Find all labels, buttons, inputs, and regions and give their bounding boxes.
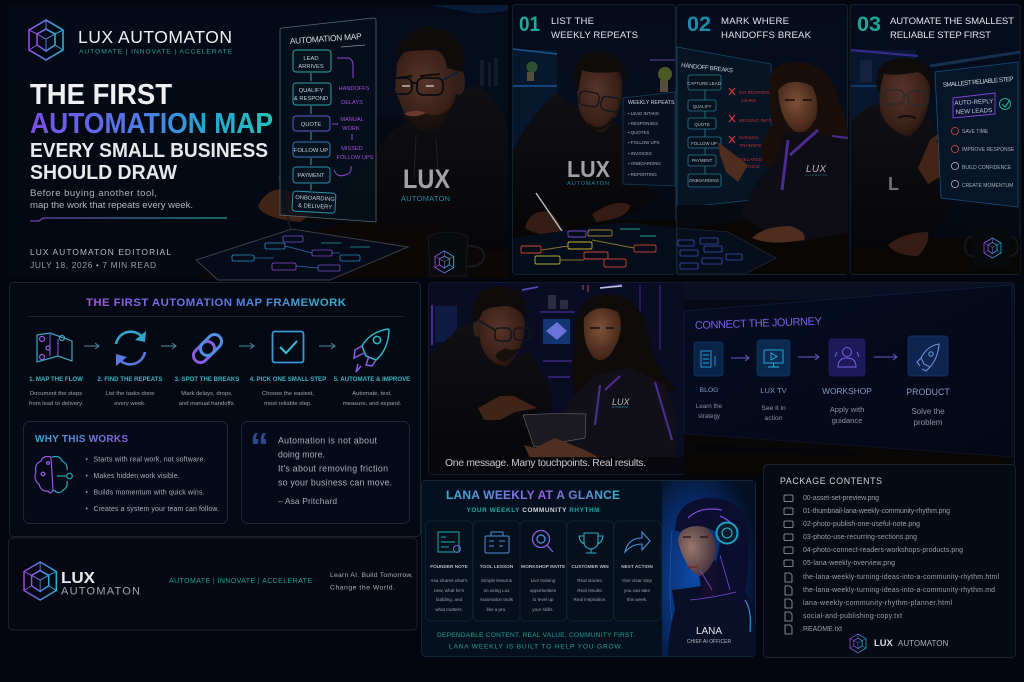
file list <box>803 495 999 633</box>
automation map glass panel: DELAYS <box>341 100 363 106</box>
icon: Lux Automaton cube logo <box>29 20 63 60</box>
step 1: map the flow <box>29 333 83 407</box>
card: founder note <box>426 521 472 621</box>
byline: LUX AUTOMATON EDITORIAL <box>30 247 171 257</box>
step: workshop: WORKSHOP <box>822 386 872 396</box>
photo: two colleagues with tablet: LUX <box>612 397 631 407</box>
smallest reliable step panel <box>935 62 1018 207</box>
photo: man pointing at panel: L <box>888 174 899 194</box>
step: blog: BLOG <box>700 387 718 394</box>
automation map glass panel: QUALIFY <box>299 88 324 94</box>
automation map glass panel: ARRIVES <box>298 64 324 70</box>
icon: note <box>438 532 460 552</box>
panel: quote <box>242 422 410 524</box>
step number: 01 <box>519 13 540 36</box>
card: tool lesson: TOOL LESSON <box>480 564 514 569</box>
icon: map <box>37 333 72 362</box>
mug <box>965 226 1018 268</box>
handoff breaks panel: FOLLOW UP <box>691 141 717 146</box>
card: customer win: Real inspiration. <box>574 597 606 602</box>
handoff breaks panel: INVOICE <box>740 164 760 170</box>
automation map glass panel: HANDOFFS <box>339 86 370 92</box>
package logo: LUX <box>874 637 893 648</box>
step 5: automate and improve: 5. AUTOMATE & IMPROVE <box>334 376 410 383</box>
automation map glass panel: MANUAL <box>340 117 364 123</box>
lana name <box>687 626 731 645</box>
file list: 00-asset-set-preview.png <box>803 495 879 502</box>
panel: connect the journey <box>428 282 1014 475</box>
icon: refresh <box>116 331 146 366</box>
automation map glass panel: FOLLOW UPS <box>337 155 374 161</box>
automation map glass panel: ONBOARDING <box>295 195 335 203</box>
handoff breaks panel: DELAYED <box>740 157 763 163</box>
framework title: THE FIRST AUTOMATION MAP FRAMEWORK <box>86 297 347 309</box>
lana name: LANA <box>696 626 722 637</box>
panel: framework <box>10 282 420 536</box>
card: tool lesson: like a pro. <box>487 607 506 612</box>
subheading <box>30 188 193 211</box>
automation map glass panel: AUTOMATION MAP <box>289 31 362 46</box>
handoff breaks panel: HANDOFF BREAKS <box>681 62 733 74</box>
panel: why this works: Starts with real work, not software. <box>94 456 206 464</box>
handoff breaks panel: PAYMENT <box>692 158 713 163</box>
card: customer win: Real stories. <box>577 578 603 583</box>
footer brand: LUX <box>61 570 95 587</box>
smallest reliable step panel: SAVE TIME <box>962 129 989 135</box>
step: product: problem <box>914 418 943 427</box>
step 3: spot the breaks: Mark delays, drops, <box>181 391 233 397</box>
weekly repeats panel: ▪ RESPONSES <box>628 121 658 126</box>
file list: README.txt <box>803 626 842 633</box>
smallest reliable step panel: NEW LEADS <box>956 107 992 116</box>
panel: quote: Automation is not about <box>278 436 378 446</box>
journey arrows <box>731 354 897 361</box>
card: tool lesson: on using Lux <box>483 588 510 593</box>
weekly repeats panel: ▪ REPORTING <box>628 172 657 177</box>
icon: arrow <box>625 532 650 552</box>
card: founder note: what matters. <box>435 607 463 612</box>
panel: quote: – Asa Pritchard <box>278 496 337 506</box>
weekly repeats panel: ▪ LEAD INTAKE <box>628 111 659 116</box>
smallest reliable step panel: IMPROVE RESPONSE <box>962 147 1015 153</box>
automation map glass panel: FOLLOW UP <box>294 148 328 154</box>
card: next action <box>614 521 661 621</box>
package logo: AUTOMATON <box>898 639 948 648</box>
step 1: map the flow: from lead to delivery. <box>29 401 83 407</box>
step number: 02 <box>687 13 711 36</box>
weekly repeats panel: ▪ INVOICES <box>628 151 652 156</box>
file list: social-and-publishing-copy.txt <box>803 613 902 620</box>
file list: 04-photo-connect-readers-workshops-products.png <box>803 547 963 554</box>
step heading: WEEKLY REPEATS <box>551 30 638 41</box>
headline: THE FIRST <box>30 79 172 111</box>
step 2: find the repeats: List the tasks done <box>105 391 155 397</box>
card: next action: you can take <box>624 588 650 593</box>
panel: why this works: WHY THIS WORKS <box>35 434 128 445</box>
icon: toolbox <box>485 532 509 553</box>
step 2: find the repeats: every week. <box>114 401 146 407</box>
step heading: AUTOMATE THE SMALLEST <box>890 16 1014 27</box>
brand name: LUX AUTOMATON <box>78 27 232 47</box>
file list: 05-lana-weekly-overview.png <box>803 560 895 567</box>
photo: woman pointing at panel: LUX <box>806 164 826 175</box>
file icons <box>784 495 793 634</box>
panel: why this works: Builds momentum with quick wins. <box>94 490 205 496</box>
byline: JULY 18, 2026 • 7 MIN READ <box>30 260 156 270</box>
card: customer win: Real results. <box>577 588 603 593</box>
photo: presenter with hoodie <box>195 15 508 278</box>
step: workshop: Apply with <box>830 405 864 414</box>
panel: lana weekly <box>422 480 756 656</box>
step heading: LIST THE <box>551 16 594 27</box>
step: product <box>906 336 950 427</box>
step 2: find the repeats: 2. FIND THE REPEATS <box>98 376 162 383</box>
mug <box>428 232 484 276</box>
smallest reliable step panel: CREATE MOMENTUM <box>962 183 1013 189</box>
step 5: automate and improve <box>334 329 410 407</box>
screen <box>684 285 1012 475</box>
handoff breaks panel: TRANSFER <box>739 143 765 149</box>
step: lux tv: See it in <box>761 405 786 412</box>
handoff breaks panel: NO RESPONSE <box>739 90 774 96</box>
file list: 03-photo-use-recurring-sections.png <box>803 534 917 541</box>
automation map glass panel: WORK <box>342 126 360 132</box>
panel: step 02 <box>676 4 848 274</box>
step: product: PRODUCT <box>906 387 950 397</box>
card: workshop invite: WORKSHOP INVITE <box>521 564 565 569</box>
card: founder note: FOUNDER NOTE <box>430 564 468 569</box>
photo: man drawing on tablet: AUTOMATON <box>567 181 609 187</box>
footer motto <box>330 572 413 592</box>
panel: why this works: Creates a system your team can follow. <box>94 506 219 513</box>
card: workshop invite: to level up <box>533 597 554 602</box>
icon: brain <box>35 456 72 493</box>
icon: trophy <box>579 533 603 554</box>
brand tagline: AUTOMATE | INNOVATE | ACCELERATE <box>79 48 232 56</box>
panel: why this works: Makes hidden work visible. <box>94 473 180 480</box>
step 1: map the flow: 1. MAP THE FLOW <box>29 376 83 383</box>
icon: chain link <box>191 332 224 365</box>
handoff breaks panel: 24HRS <box>741 98 756 104</box>
card: workshop invite: Live training <box>531 578 556 583</box>
photo: two colleagues with tablet: AUTOMATON <box>612 405 628 409</box>
panel: footer brand strip <box>8 538 417 630</box>
headline: SHOULD DRAW <box>30 161 178 184</box>
icon: footer cube logo <box>24 562 56 600</box>
step number: 03 <box>857 13 881 36</box>
handoff breaks panel: CAPTURE LEAD <box>687 81 721 86</box>
step 4: pick one small step: most reliable step. <box>264 401 312 407</box>
background shelves <box>513 49 675 155</box>
step 5: automate and improve: measure, and expand. <box>343 401 402 407</box>
icon: magnifier <box>532 530 553 552</box>
photo: woman pointing at panel: AUTOMATON <box>805 173 827 177</box>
tablet with coloured nodes <box>513 222 676 274</box>
card: founder note: Asa shares what's <box>430 578 468 583</box>
panel: why this works <box>24 422 228 524</box>
step: blog <box>694 342 723 420</box>
card: customer win: CUSTOMER WIN <box>571 564 609 569</box>
icon: check box <box>272 332 304 362</box>
file list: 02-photo-publish-one-useful-note.png <box>803 521 920 528</box>
card: founder note: building, and <box>436 597 462 602</box>
file list: the-lana-weekly-turning-ideas-into-a-community-rhythm.html <box>803 574 999 581</box>
lana title: LANA WEEKLY AT A GLANCE <box>446 488 620 502</box>
weekly repeats panel: ▪ QUOTES <box>628 130 649 135</box>
weekly repeats panel: ▪ ONBOARDING <box>628 161 661 166</box>
panel: step 03 <box>850 4 1020 274</box>
headline: EVERY SMALL BUSINESS <box>30 139 268 162</box>
automation map glass panel: PAYMENT <box>297 173 325 179</box>
step 4: pick one small step: Choose the easiest, <box>262 391 314 397</box>
file list: the-lana-weekly-turning-ideas-into-a-community-rhythm.md <box>803 587 995 594</box>
weekly repeats panel: ▪ FOLLOW UPS <box>628 140 660 145</box>
card: tool lesson <box>473 521 520 621</box>
step: workshop: guidance <box>832 416 862 425</box>
step: lux tv: LUX TV <box>760 386 788 395</box>
card: workshop invite <box>520 521 566 621</box>
footer brand <box>61 570 140 598</box>
smallest reliable step panel: AUTO-REPLY <box>954 98 994 107</box>
panel: package contents <box>764 464 1016 658</box>
lana closing statement: DEPENDABLE CONTENT. REAL VALUE. COMMUNITY FIRST. <box>437 632 635 639</box>
panel: why this works: • <box>86 456 88 464</box>
step heading: RELIABLE STEP FIRST <box>890 30 991 41</box>
panel: step 01 <box>512 4 676 274</box>
portrait: Lana <box>662 481 756 656</box>
file list: lana-weekly-community-rhythm-planner.html <box>803 600 952 607</box>
step: lux tv: action <box>764 415 783 422</box>
lana closing statement <box>437 632 635 650</box>
tablet with nodes <box>677 228 776 274</box>
subheading: map the work that repeats every week. <box>30 200 193 211</box>
card: workshop invite: opportunities <box>530 588 557 593</box>
automation map glass panel: QUOTE <box>301 122 321 128</box>
footer motto: Learn AI. Build Tomorrow. <box>330 572 413 579</box>
headline: AUTOMATION MAP <box>30 108 273 140</box>
weekly repeats panel <box>623 92 675 186</box>
panel: quote: so your business can move. <box>278 478 392 488</box>
step 5: automate and improve: Automate, test, <box>352 391 392 397</box>
step heading: HANDOFFS BREAK <box>721 30 812 41</box>
tablet with flow diagram <box>196 229 408 280</box>
step 3: spot the breaks: and manual handoffs. <box>179 401 236 407</box>
photo: man drawing on tablet <box>513 52 676 274</box>
card: next action: One clear step <box>622 578 652 583</box>
package logo <box>850 634 948 653</box>
journey heading: CONNECT THE JOURNEY <box>695 316 823 332</box>
lana subtitle: YOUR WEEKLY COMMUNITY RHYTHM <box>466 507 600 514</box>
step: product: Solve the <box>911 407 945 416</box>
card: customer win <box>567 521 614 621</box>
background shelves <box>851 50 1020 150</box>
photo: two colleagues with tablet <box>429 286 677 470</box>
step heading <box>890 16 1014 41</box>
handoff breaks panel <box>677 47 774 208</box>
headline <box>30 79 273 184</box>
step heading: MARK WHERE <box>721 16 789 27</box>
card: workshop invite: your skills. <box>532 607 554 612</box>
byline <box>30 247 171 270</box>
smallest reliable step panel: BUILD CONFIDENCE <box>962 165 1012 171</box>
step 3: spot the breaks: 3. SPOT THE BREAKS <box>175 376 239 383</box>
panel: why this works: • <box>86 473 88 480</box>
step heading <box>721 16 812 41</box>
panel: hero <box>8 5 508 280</box>
photo: man drawing on tablet: LUX <box>567 156 611 182</box>
step heading <box>551 16 638 41</box>
step: blog: strategy <box>698 413 721 420</box>
automation map glass panel: & DELIVERY <box>298 203 332 211</box>
accent line <box>30 218 227 221</box>
footer tagline: AUTOMATE | INNOVATE | ACCELERATE <box>169 578 312 585</box>
lana closing statement: LANA WEEKLY IS BUILT TO HELP YOU GROW. <box>449 644 623 650</box>
step: blog: Learn the <box>696 403 723 410</box>
automation map glass panel: LEAD <box>303 56 319 62</box>
automation map glass panel: & RESPOND <box>294 96 328 102</box>
step 2: find the repeats <box>98 331 162 407</box>
footer brand: AUTOMATON <box>61 586 140 598</box>
step: lux tv <box>757 340 790 422</box>
photo: man pointing at panel <box>851 58 1020 274</box>
handoff breaks panel: QUALIFY <box>693 104 711 109</box>
package title: PACKAGE CONTENTS <box>780 476 882 486</box>
step 3: spot the breaks <box>175 332 239 407</box>
subheading: Before buying another tool, <box>30 188 157 199</box>
handoff breaks panel: MANUAL <box>739 135 759 141</box>
weekly repeats panel: WEEKLY REPEATS <box>628 100 675 106</box>
panel: why this works: • <box>86 490 88 496</box>
panel: quote: It's about removing friction <box>278 464 388 474</box>
photo background <box>429 283 1014 468</box>
card: next action: this week. <box>627 597 647 602</box>
step 4: pick one small step <box>250 332 326 407</box>
photo: presenter with hoodie: LUX <box>403 164 450 194</box>
lana name: CHIEF AI OFFICER <box>687 639 731 645</box>
step 4: pick one small step: 4. PICK ONE SMALL STEP <box>250 376 326 383</box>
automation map glass panel: MISSED <box>341 146 363 152</box>
footer motto: Change the World. <box>330 584 395 592</box>
file list: 01-thumbnail-lana-weekly-community-rhythm.png <box>803 508 950 515</box>
handoff breaks panel: ONBOARDING <box>689 178 720 183</box>
panel: quote: doing more. <box>278 450 325 460</box>
photo: woman pointing at panel <box>677 62 848 274</box>
step: workshop <box>822 339 872 425</box>
arrows between steps <box>84 343 335 349</box>
step 1: map the flow: Document the steps <box>30 391 82 397</box>
card: next action: NEXT ACTION <box>621 564 653 569</box>
caption: One message. Many touchpoints. Real results. <box>445 458 646 469</box>
card: founder note: new, what he's <box>434 588 465 593</box>
photo: presenter with hoodie: AUTOMATON <box>401 194 450 203</box>
panel: why this works: • <box>86 506 88 513</box>
panel: quote: “ <box>250 426 269 468</box>
icon: rocket <box>354 329 389 372</box>
smallest reliable step panel: SMALLEST RELIABLE STEP <box>943 76 1014 89</box>
card: tool lesson: Automaton tools <box>480 597 514 602</box>
handoff breaks panel: QUOTE <box>694 122 710 127</box>
handoff breaks panel: MISSING INFO <box>739 118 772 124</box>
automation map glass panel <box>280 18 376 222</box>
card: tool lesson: Simple lessons <box>481 578 513 583</box>
